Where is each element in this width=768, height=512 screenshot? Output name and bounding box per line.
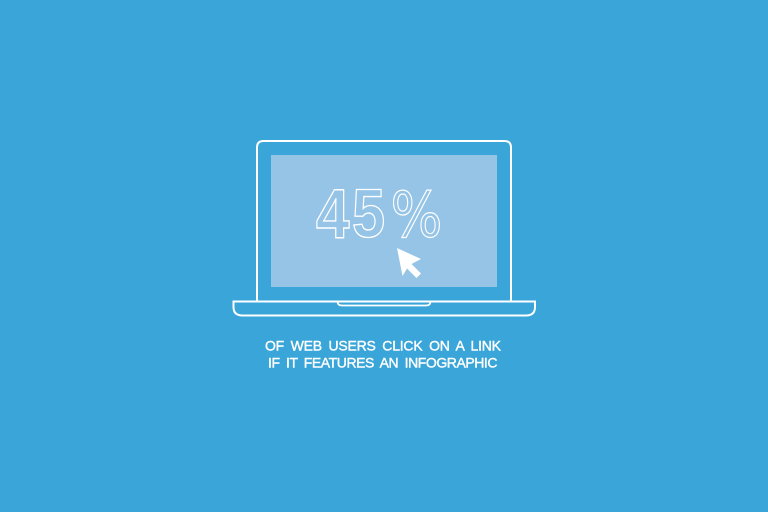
caption: IF IT FEATURES AN INFOGRAPHIC xyxy=(268,354,498,370)
statistic: 45%: 5 xyxy=(352,175,385,252)
statistic: 45%: 4 xyxy=(316,175,349,253)
statistic: 45%: % xyxy=(390,179,442,251)
laptop notch xyxy=(338,302,430,306)
caption: OF WEB USERS CLICK ON A LINK xyxy=(265,338,502,354)
laptop screen xyxy=(271,155,497,287)
icon: mouse cursor xyxy=(397,248,421,278)
caption xyxy=(265,338,502,370)
laptop lid outline xyxy=(257,141,511,301)
laptop base xyxy=(234,302,535,316)
laptop illustration xyxy=(234,141,535,316)
statistic: 45% xyxy=(316,175,442,253)
